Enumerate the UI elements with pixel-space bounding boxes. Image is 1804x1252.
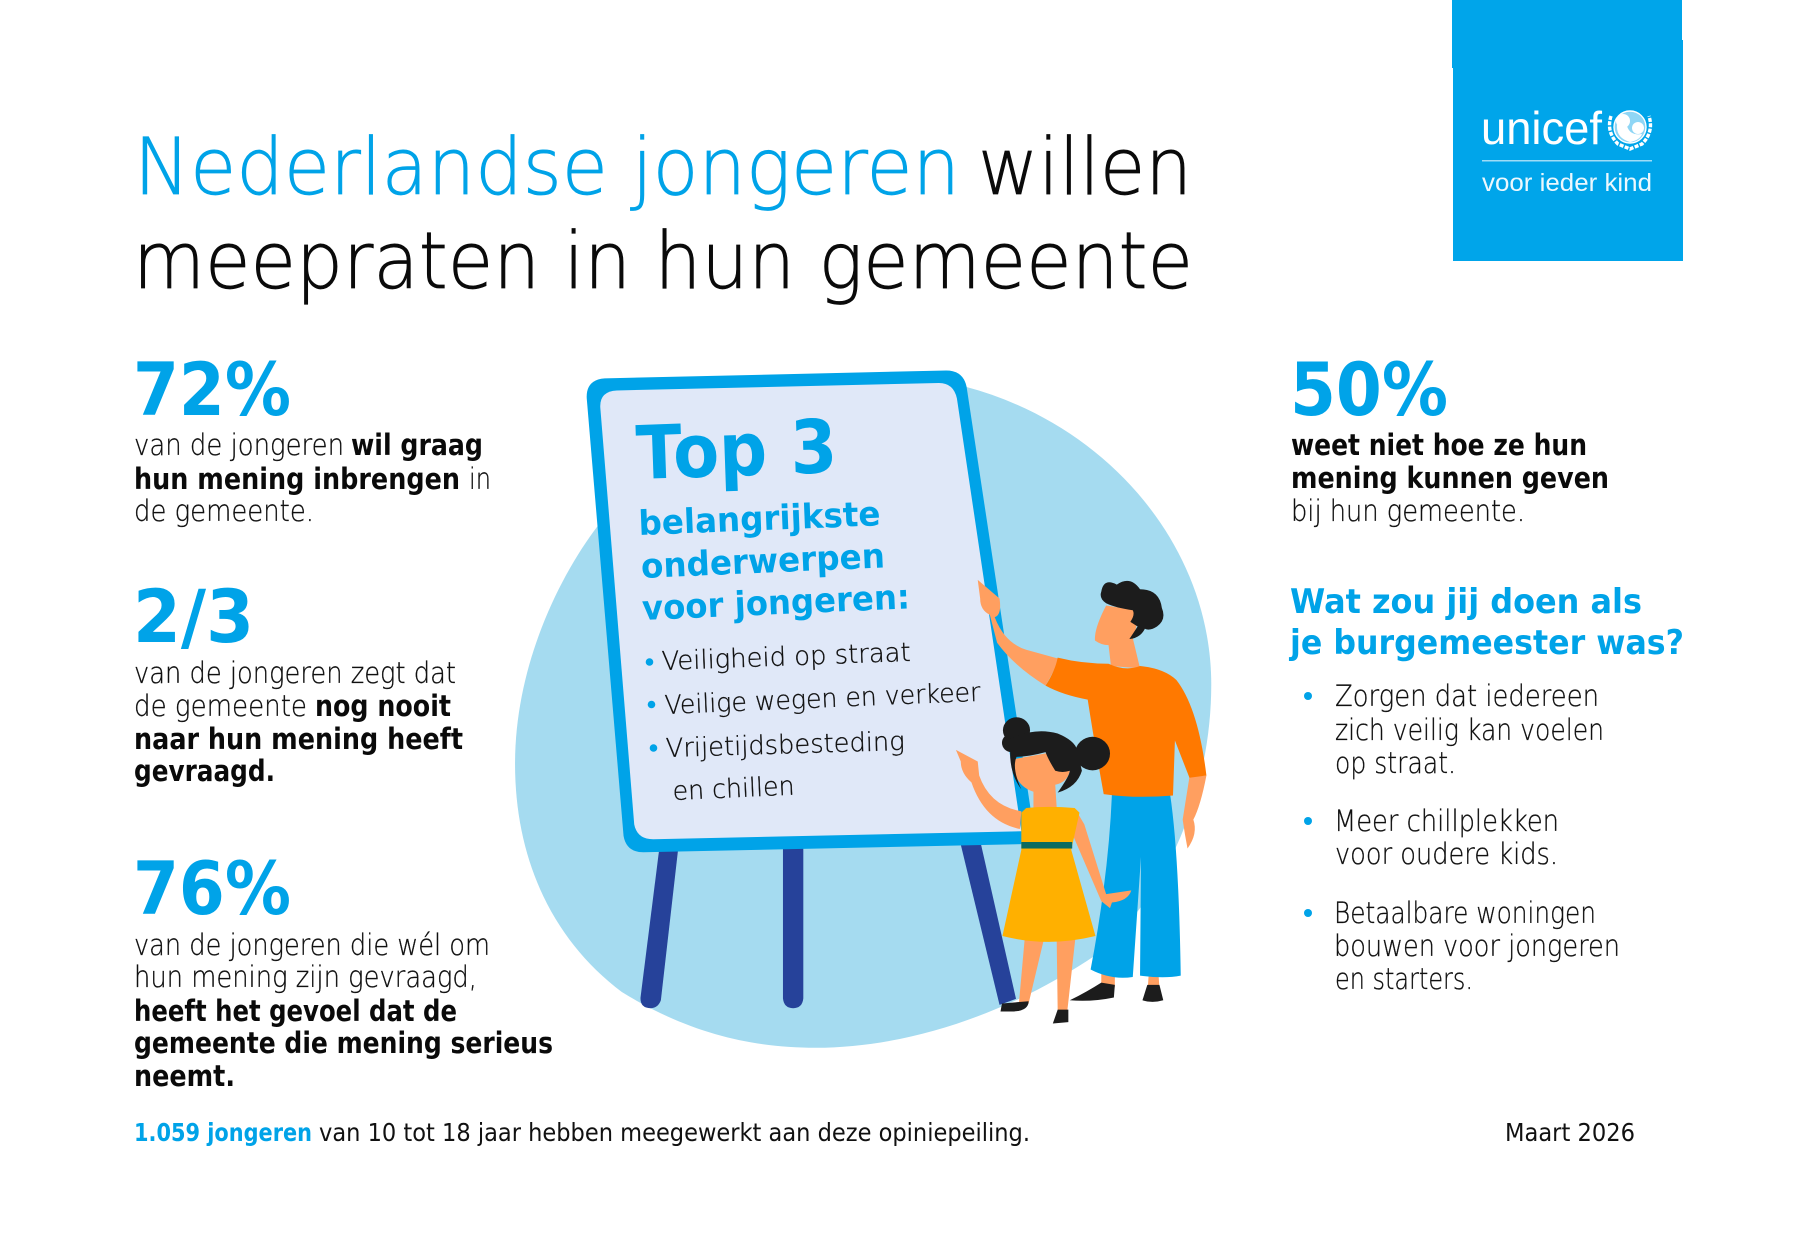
stat: 50%: mening kunnen geven (1291, 461, 1609, 495)
flipchart stand (640, 841, 1016, 1008)
stat: 50%: bij hun gemeente. (1291, 494, 1525, 528)
girl (956, 717, 1131, 1024)
title (133, 123, 1193, 307)
heading: burgemeester question (1288, 582, 1684, 663)
stat: 72% (133, 348, 491, 528)
board list: Vrijetijdsbesteding (665, 727, 905, 764)
answer 1: Zorgen dat iedereen (1335, 679, 1599, 713)
stat: 72%: van de jongeren (134, 428, 344, 462)
stat: 2/3: gevraagd. (134, 754, 275, 788)
stat: 50%: 50% (1290, 348, 1448, 433)
answer 3 (1304, 896, 1620, 996)
list: burgemeester answers (1304, 679, 1620, 996)
date: Maart 2026 (1505, 1118, 1635, 1147)
background blob (515, 387, 1211, 1048)
illustration: flipchart with man and girl (515, 370, 1211, 1048)
stat: 72%: in (469, 462, 491, 496)
stat: 76%: neemt. (134, 1059, 235, 1093)
board heading: top 3: onderwerpen (640, 536, 886, 587)
stat: 76%: heeft het gevoel dat de (134, 994, 457, 1028)
stat: 76%: hun mening zijn gevraagd, (134, 960, 477, 994)
title: willen (978, 123, 1192, 213)
answer 2: voor oudere kids. (1335, 837, 1558, 871)
stat: 2/3 (133, 575, 463, 788)
stat: 50%: weet niet hoe ze hun (1291, 428, 1587, 462)
board heading: top 3: voor jongeren: (641, 577, 911, 629)
answer 2 (1304, 804, 1559, 871)
footer note: 1.059 jongeren (134, 1118, 312, 1147)
board list: en chillen (672, 771, 795, 807)
title: meepraten in hun gemeente (133, 217, 1193, 307)
stat: 2/3: de gemeente (134, 689, 307, 723)
answer 3: en starters. (1335, 962, 1473, 996)
board heading: top 3: belangrijkste (638, 494, 881, 544)
answer 1: op straat. (1335, 746, 1456, 780)
stat: 2/3: naar hun mening heeft (134, 722, 463, 756)
board list: Veilige wegen en verkeer (664, 678, 981, 721)
logo: unicef: voor ieder kind (1482, 169, 1652, 197)
stat: 2/3: 2/3 (133, 575, 254, 660)
stat: 76%: van de jongeren die wél om (134, 928, 490, 962)
stat: 76%: 76% (133, 847, 291, 932)
answer 3: Betaalbare woningen (1334, 896, 1596, 930)
answer 2: Meer chillplekken (1334, 804, 1559, 838)
stat: 2/3: nog nooit (315, 689, 451, 723)
stat: 50% (1290, 348, 1609, 528)
stat: 72%: hun mening inbrengen (134, 462, 460, 496)
heading: burgemeester question: je burgemeester was? (1288, 623, 1684, 663)
logo: unicef: unicef (1481, 102, 1602, 154)
answer 1: zich veilig kan voelen (1335, 713, 1604, 747)
man (978, 580, 1206, 1002)
footer note: van 10 tot 18 jaar hebben meegewerkt aan deze opiniepeiling. (319, 1118, 1030, 1147)
board list: Veiligheid op straat (661, 638, 911, 677)
flipchart board (587, 370, 1036, 852)
stat: 76% (133, 847, 553, 1093)
answer 3: bouwen voor jongeren (1334, 929, 1620, 963)
answer 1 (1304, 679, 1604, 780)
icon: unicef emblem (1610, 111, 1650, 149)
board heading: top 3 (635, 404, 911, 629)
heading: burgemeester question: Wat zou jij doen als (1290, 582, 1642, 622)
stat: 72%: 72% (133, 348, 291, 433)
stat: 72%: de gemeente. (134, 494, 314, 528)
title: Nederlandse jongeren (134, 123, 960, 213)
board list (646, 638, 981, 807)
logo: unicef (1452, 0, 1683, 261)
stat: 76%: gemeente die mening serieus (134, 1026, 553, 1060)
stat: 2/3: van de jongeren zegt dat (134, 656, 456, 690)
stat: 72%: wil graag (351, 428, 483, 462)
board heading: top 3: Top 3 (635, 404, 839, 497)
